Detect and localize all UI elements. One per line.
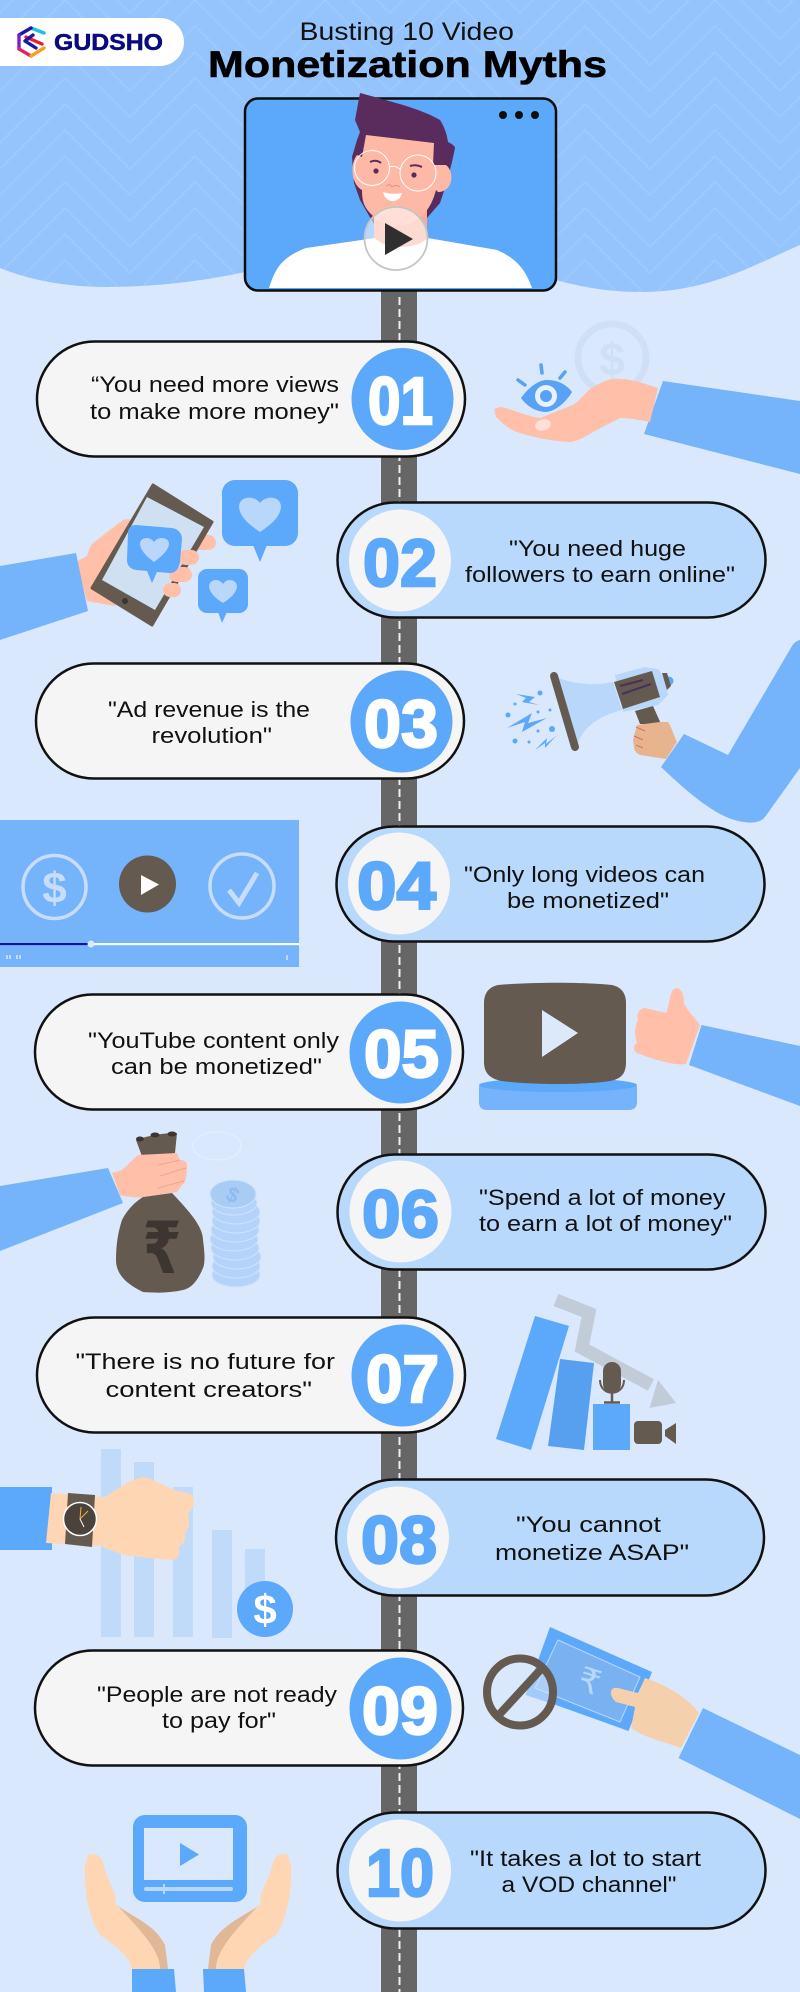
quote 03: revolution" (152, 723, 272, 748)
quote 02: followers to earn online" (465, 562, 735, 587)
presenter glasses and features (354, 150, 436, 201)
icon: dollar coin (578, 324, 646, 392)
icon: large heart bubble (222, 480, 298, 562)
bank note (526, 1627, 652, 1731)
sleeve (0, 1487, 52, 1550)
icon: eye (518, 365, 572, 412)
quote 07: "There is no future for (76, 1349, 336, 1374)
fingers (163, 550, 199, 597)
number 07: 07 (366, 1342, 439, 1417)
icon: check (210, 854, 274, 918)
sparks (506, 690, 556, 750)
presenter neck (374, 205, 427, 262)
hand (633, 722, 677, 759)
palm (494, 379, 658, 442)
quote 01 (90, 372, 339, 424)
sleeve (0, 553, 88, 640)
hand (112, 1153, 187, 1197)
quote 10: a VOD channel" (502, 1872, 677, 1897)
myth 06 pill (338, 1154, 766, 1270)
icon: microphone (600, 1362, 624, 1402)
myth 03 pill (36, 664, 464, 778)
coin dollar: $ (222, 1182, 243, 1208)
myth 02 pill (338, 502, 766, 618)
icon: small heart bubble (198, 569, 248, 623)
quote 07: content creators" (106, 1377, 312, 1402)
icon: camera (634, 1421, 676, 1444)
bag neck (136, 1133, 177, 1159)
quote 04: be monetized" (507, 888, 669, 913)
number 09: 09 (362, 1674, 438, 1749)
quote 03: "Ad revenue is the (108, 697, 310, 722)
illustration: watch hand and bars (0, 1449, 293, 1638)
number 02: 02 (363, 526, 437, 601)
faint ghost circles (193, 1132, 241, 1160)
bar chart (101, 1449, 265, 1638)
quote 02: "You need huge (509, 536, 686, 561)
quote 06: to earn a lot of money" (479, 1211, 732, 1236)
logo wordmark: GUDSHO (54, 29, 163, 55)
number 03: 03 (364, 687, 438, 762)
quote 06: "Spend a lot of money (479, 1185, 726, 1210)
illustration: hands holding video screen (85, 1815, 291, 1992)
bag body (116, 1193, 204, 1293)
logo badge (0, 18, 184, 66)
thumb nail (534, 418, 552, 432)
quote 06 (479, 1185, 732, 1236)
quote 05: can be monetized" (111, 1054, 322, 1079)
icon: play button (364, 207, 428, 270)
presenter face (352, 135, 451, 226)
screen (133, 1815, 247, 1902)
myth 07 pill (37, 1318, 465, 1432)
quote 10 (470, 1846, 702, 1897)
phone (92, 485, 212, 625)
fist (46, 1477, 194, 1560)
presenter hair back (352, 93, 455, 226)
myth 05 pill (35, 994, 463, 1110)
quote 02 (465, 536, 735, 587)
quote 05: "YouTube content only (88, 1028, 340, 1053)
thumbs up hand (634, 988, 700, 1064)
illustration: hand with eye and coin (494, 324, 800, 474)
number 08: 08 (361, 1503, 437, 1578)
number 01: 01 (368, 364, 433, 439)
video card with presenter (245, 93, 556, 290)
myth 04 pill (336, 826, 764, 942)
title (208, 18, 607, 85)
body (615, 667, 668, 712)
quote 05 (88, 1028, 340, 1079)
quote 07 (76, 1349, 336, 1402)
myth 10 pill (338, 1812, 766, 1928)
header wave background (0, 0, 800, 292)
handle (635, 706, 661, 724)
bars (496, 1316, 569, 1450)
myth 01 pill (37, 342, 465, 456)
rupee sign: ₹ (142, 1207, 182, 1291)
rim (554, 676, 575, 747)
megaphone cap (664, 676, 674, 686)
quote 04 (464, 862, 705, 913)
prohibition sign (487, 1658, 553, 1726)
illustration: no money (487, 1627, 800, 1819)
quote 08: "You cannot (516, 1512, 662, 1537)
quote 01: “You need more views (91, 372, 339, 397)
illustration: megaphone (506, 640, 800, 823)
icon: dollar coin: $ (599, 333, 625, 385)
sleeve (678, 1708, 800, 1819)
quote 09: "People are not ready (97, 1682, 338, 1707)
presenter shirt (269, 238, 532, 288)
quote 03 (108, 697, 310, 748)
hand (611, 1678, 699, 1748)
index fingertip behind phone (190, 535, 216, 550)
base (479, 1086, 637, 1110)
illustration: money bag and coins (0, 1132, 261, 1293)
icon: dollar coin (237, 1581, 293, 1637)
quote 10: "It takes a lot to start (470, 1846, 702, 1871)
rupee on note: ₹ (573, 1660, 606, 1704)
cone (558, 678, 622, 743)
quote 08 (495, 1512, 689, 1565)
myth 08 pill (336, 1480, 764, 1596)
arm (661, 640, 800, 823)
illustration: play block with thumbs up (479, 983, 800, 1110)
number 10: 10 (366, 1836, 434, 1911)
icon: dollar circle: $ (42, 864, 67, 913)
icon: dollar circle (23, 856, 86, 918)
title: Busting 10 Video (300, 18, 514, 46)
title: Monetization Myths (208, 44, 607, 85)
quote 01: to make more money" (90, 399, 339, 424)
myth 09 pill (35, 1650, 463, 1766)
quote 08: monetize ASAP" (495, 1540, 689, 1565)
icon: wrist watch (64, 1493, 96, 1547)
icon: phone heart bubble (127, 525, 182, 583)
coin stack (210, 1180, 261, 1287)
sleeve (0, 1168, 123, 1251)
hand (76, 519, 135, 606)
road timeline (381, 285, 417, 1992)
quote 09: to pay for" (162, 1708, 276, 1733)
hand sleeve (644, 381, 800, 474)
icon: play (119, 856, 176, 912)
quote 09 (97, 1682, 338, 1733)
trend arrow (556, 1300, 651, 1385)
illustration: phone with hearts (0, 480, 298, 640)
icon: gudsho logo (19, 28, 44, 56)
sleeves (132, 1969, 176, 1992)
illustration: video player panel (0, 820, 299, 967)
progress bar (0, 940, 299, 960)
window dots (499, 111, 539, 119)
right hand (208, 1854, 291, 1969)
sleeve (689, 1025, 800, 1106)
left hand (85, 1854, 168, 1969)
icon: dollar coin: $ (253, 1586, 277, 1633)
number 06: 06 (362, 1177, 439, 1252)
number 04: 04 (357, 849, 436, 924)
illustration: falling bars chart (496, 1300, 676, 1450)
play block (484, 983, 626, 1084)
number 05: 05 (364, 1017, 439, 1092)
quote 04: "Only long videos can (464, 862, 705, 887)
